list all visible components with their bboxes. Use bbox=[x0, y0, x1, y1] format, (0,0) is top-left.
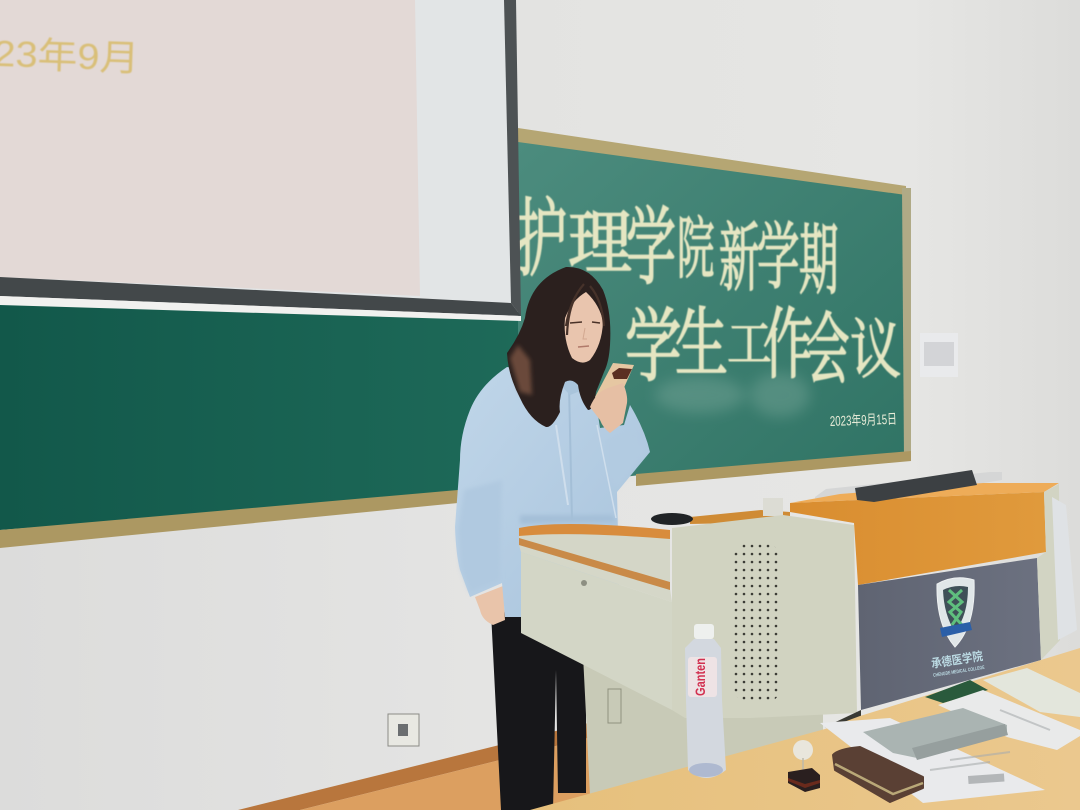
curved orange rail bbox=[519, 524, 670, 539]
lectern bbox=[519, 470, 1077, 795]
lectern right side bbox=[1037, 484, 1060, 660]
orange strip bbox=[519, 538, 670, 590]
trousers bbox=[491, 610, 586, 810]
left top surface bbox=[519, 533, 670, 582]
school name: CHENGDE MEDICAL COLLEGE bbox=[933, 665, 986, 679]
chalkboard: left section bbox=[0, 303, 525, 548]
mouse bbox=[651, 513, 693, 525]
school name bbox=[930, 648, 986, 679]
chalk writing: title line 2: 学 bbox=[625, 302, 682, 391]
projection screen bbox=[0, 0, 521, 321]
hair bbox=[507, 267, 610, 427]
desk bbox=[530, 648, 1080, 810]
floor and skirting board bbox=[238, 720, 600, 810]
wallet on desk bbox=[833, 747, 923, 802]
chalk writing: title line 1: 学 bbox=[757, 217, 799, 298]
speaker side panel bbox=[672, 515, 857, 718]
grey logo panel bbox=[858, 558, 1041, 710]
silver laptop bbox=[815, 472, 1002, 503]
chalk writing: title line 2 bbox=[625, 302, 901, 393]
shadow under lectern bbox=[825, 710, 861, 729]
back orange rail bbox=[690, 510, 790, 524]
pouch on desk bbox=[863, 708, 1008, 760]
chalk writing: title line 2: 会 bbox=[806, 307, 849, 393]
chalk writing: title line 1: 院 bbox=[677, 211, 715, 287]
orange top front bbox=[790, 492, 1046, 585]
wall socket bbox=[388, 714, 419, 746]
eraser smudges bbox=[655, 373, 810, 417]
school name: 承德医学院 bbox=[930, 648, 984, 671]
chalk writing: title line 1: 新 bbox=[719, 218, 759, 301]
speaker holes bbox=[732, 542, 782, 704]
chalk writing: title line 1 bbox=[516, 195, 839, 305]
school shield logo bbox=[937, 578, 974, 647]
lower wall bbox=[0, 440, 1080, 810]
lower cabinet bbox=[583, 655, 823, 795]
hair highlight bbox=[510, 345, 532, 395]
facial features bbox=[570, 322, 600, 323]
drawer front bbox=[521, 552, 672, 710]
plastic bag bbox=[1052, 497, 1077, 640]
orange top surface bbox=[790, 483, 1059, 503]
jacket bbox=[455, 367, 650, 617]
hand at side bbox=[475, 586, 505, 625]
cabinet door outline bbox=[608, 689, 621, 723]
chalk writing: date: 2023年9月15日 bbox=[830, 411, 897, 429]
papers on desk bbox=[820, 668, 1080, 803]
chalk writing: title line 2: 工 bbox=[727, 318, 772, 373]
woman speaking bbox=[455, 267, 650, 810]
device on top bbox=[855, 470, 977, 502]
chalk writing: title line 2: 作 bbox=[763, 303, 813, 389]
chalk writing: title line 1: 护 bbox=[516, 195, 567, 288]
drawer lock bbox=[581, 580, 587, 586]
chalk writing: title line 1: 学 bbox=[626, 203, 676, 297]
hand holding phone bbox=[590, 383, 627, 433]
phone bbox=[595, 363, 634, 402]
notice on wall bbox=[920, 333, 958, 377]
drawer upper band bbox=[519, 545, 672, 602]
chalk writing: title line 2: 生 bbox=[675, 303, 728, 386]
white fitting bbox=[763, 498, 783, 516]
small award on desk bbox=[788, 740, 820, 792]
face bbox=[565, 292, 603, 363]
jacket shading bbox=[458, 430, 645, 592]
fringe strands bbox=[566, 284, 604, 335]
chalk writing: title line 2: 议 bbox=[850, 314, 901, 386]
water bottle: Ganten bbox=[692, 658, 708, 696]
water bottle bbox=[685, 624, 726, 778]
chalk writing: title line 1: 理 bbox=[568, 204, 632, 283]
chalk writing: title line 1: 期 bbox=[799, 219, 839, 305]
hood bbox=[548, 372, 596, 395]
chalkboard: right section bbox=[516, 128, 911, 490]
